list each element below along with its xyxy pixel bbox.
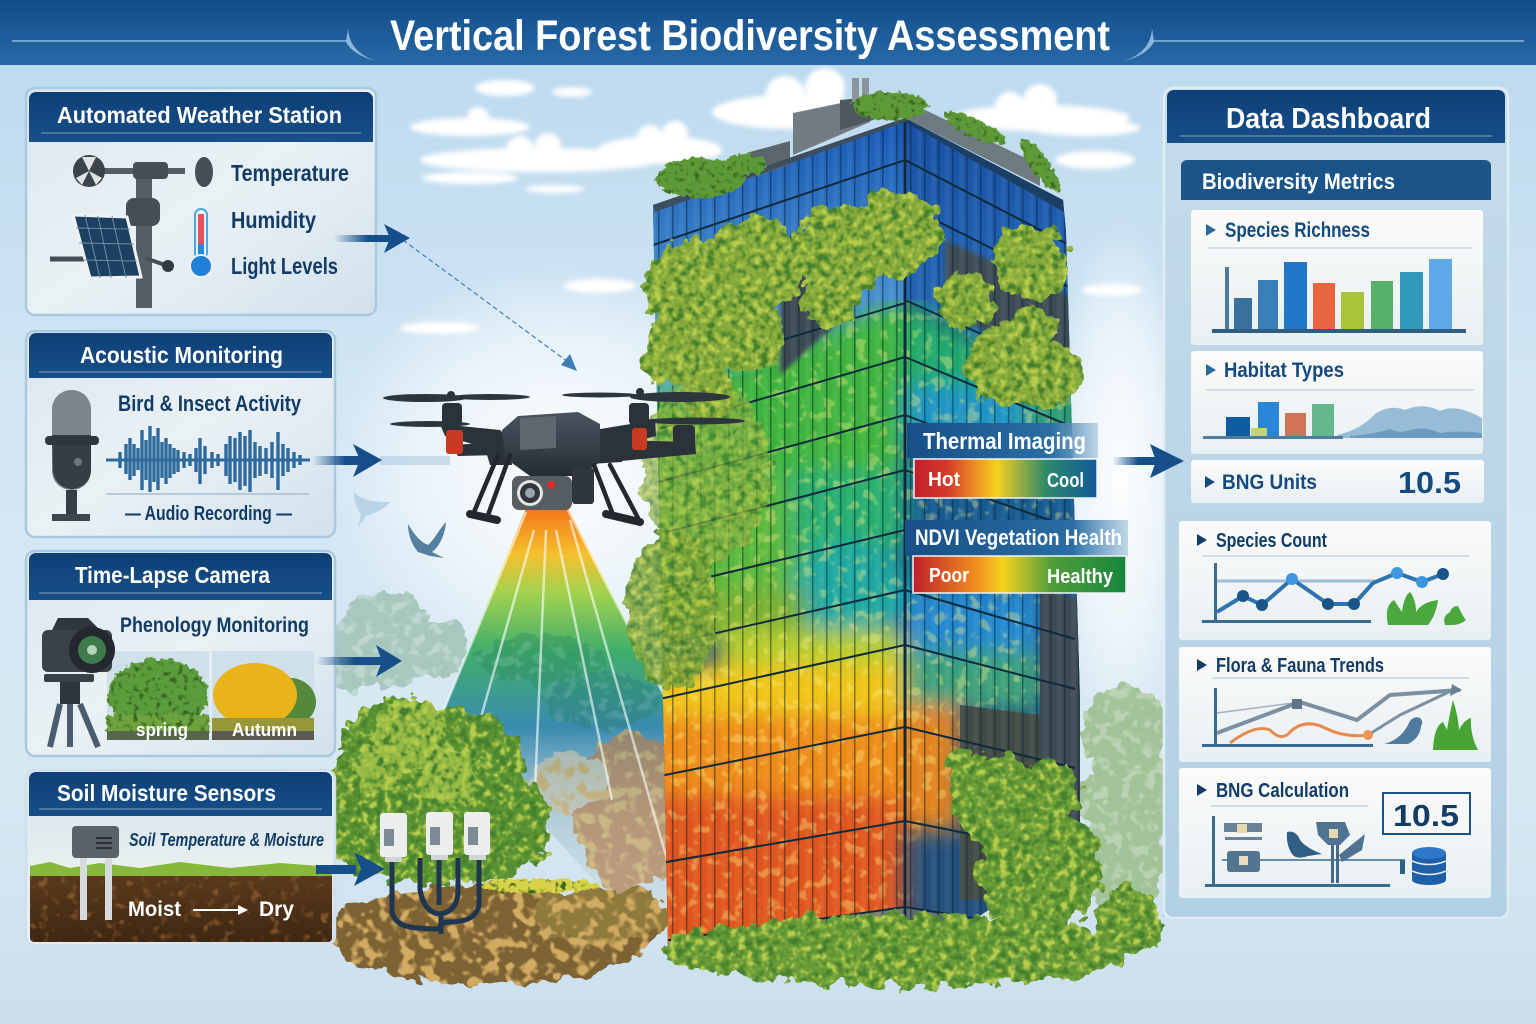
- heading: data dashboard: [1167, 90, 1505, 143]
- building: [640, 78, 1090, 970]
- card: species richness: Species Richness: [1225, 219, 1370, 242]
- card: BNG units: BNG Units: [1222, 471, 1317, 494]
- drone: [383, 388, 745, 522]
- fuselage: [502, 412, 600, 476]
- header band: [0, 0, 1536, 65]
- panel: soil moisture sensors: [26, 770, 335, 945]
- habitat chart: [1203, 402, 1482, 439]
- BNG value box: [1383, 793, 1470, 834]
- card: BNG units: 10.5: [1398, 465, 1461, 500]
- thermal colour wash on the facade: [640, 300, 1085, 965]
- panel: acoustic monitoring: [26, 331, 335, 537]
- icon: database: [1412, 847, 1446, 885]
- leaf litter ground: [325, 879, 670, 985]
- NDVI vegetation health legend: NDVI Vegetation Health: [915, 525, 1122, 550]
- sensing beam from drone: [443, 508, 770, 940]
- pale background trees: [322, 590, 1182, 908]
- moist to dry scale: Moist: [128, 898, 181, 921]
- label: audio recording: — Audio Recording —: [125, 503, 292, 525]
- heading: time-lapse: [29, 553, 332, 600]
- icon: plants: [1387, 592, 1466, 625]
- clouds: [400, 68, 1142, 334]
- audio waveform: [106, 426, 310, 492]
- arrow: acoustic to drone: [312, 444, 450, 477]
- faint trees visible through the beam: [475, 636, 660, 728]
- mullions: [640, 110, 1090, 970]
- dark glazing floors: [780, 225, 835, 375]
- moist to dry scale: Dry: [259, 898, 294, 921]
- arrow: soil panel to sensors: [316, 852, 385, 886]
- card: flora and fauna trends: [1179, 647, 1491, 762]
- heading: weather station: Automated Weather Station: [57, 102, 342, 128]
- heading: acoustic: [29, 333, 332, 378]
- card: BNG calculation: BNG Calculation: [1216, 780, 1349, 802]
- weather measurement labels: [231, 160, 349, 279]
- card: species count: Species Count: [1216, 530, 1327, 552]
- icon: thermometer: [190, 209, 212, 277]
- card: habitat types: Habitat Types: [1224, 359, 1344, 382]
- heading: soil: [29, 772, 332, 816]
- heading: time-lapse: Time-Lapse Camera: [75, 562, 270, 588]
- weather measurement labels: Humidity: [231, 207, 316, 233]
- line chart: species count: [1202, 563, 1466, 625]
- thermal imaging legend: Hot: [928, 469, 960, 491]
- heading: biodiversity metrics: [1181, 160, 1491, 200]
- NDVI vegetation health legend: Poor: [929, 565, 969, 587]
- heading: acoustic: Acoustic Monitoring: [80, 342, 283, 368]
- heading: weather station: [29, 92, 373, 142]
- camera gimbal: [572, 468, 594, 504]
- arrow: camera to drone beam: [316, 645, 402, 677]
- panel: time-lapse camera: [26, 551, 335, 756]
- arrow: building to dashboard: [1112, 444, 1184, 478]
- heading: data dashboard: Data Dashboard: [1226, 103, 1431, 135]
- seasonal photo: autumn: [212, 651, 316, 740]
- arrow: weather to drone: [334, 224, 410, 253]
- thermal imaging legend: Cool: [1047, 470, 1084, 492]
- birds: [354, 492, 446, 558]
- icon: weather mast with solar panel: [50, 155, 213, 308]
- thermal imaging legend: [907, 423, 1098, 498]
- foreground tree, left: [323, 698, 550, 884]
- card: BNG units: [1191, 460, 1484, 503]
- NDVI vegetation health legend: Healthy: [1047, 566, 1114, 588]
- card: species count: [1179, 521, 1491, 640]
- data link line to drone: [403, 240, 577, 371]
- moist to dry scale: [128, 898, 294, 921]
- roof plant and parapet: [653, 78, 1064, 212]
- seasonal photo: autumn: Autumn: [232, 720, 297, 740]
- landing legs: [470, 455, 640, 522]
- label: bird and insect activity: Bird & Insect Activity: [118, 391, 302, 416]
- panel: automated weather station: [26, 88, 376, 315]
- icon: soil probe: [72, 826, 119, 920]
- roof planting: [656, 92, 1066, 198]
- card: species richness: [1191, 210, 1483, 345]
- vertical forest foliage: [627, 191, 1082, 690]
- seasonal photo: spring: spring: [136, 720, 188, 740]
- BNG value box: 10.5: [1393, 798, 1459, 833]
- heading: biodiversity metrics: Biodiversity Metrics: [1202, 169, 1395, 194]
- BNG diagram: [1205, 816, 1446, 887]
- weather measurement labels: Temperature: [231, 160, 349, 186]
- faded lower-left foliage: [640, 380, 770, 560]
- icon: bird: [1384, 717, 1422, 744]
- icon: plant: [1433, 700, 1478, 750]
- card: habitat types: [1191, 351, 1483, 454]
- bar chart: species richness: [1212, 259, 1466, 333]
- label: phenology monitoring: Phenology Monitoring: [120, 614, 309, 637]
- base storey: [668, 908, 904, 946]
- thermal imaging legend: Thermal Imaging: [923, 428, 1086, 454]
- weather measurement labels: Light Levels: [231, 253, 338, 279]
- card: flora and fauna trends: Flora & Fauna Trends: [1216, 655, 1384, 677]
- title: Vertical Forest Biodiversity Assessment: [390, 12, 1110, 60]
- icon: camera on tripod: [42, 618, 115, 747]
- soil sensor units: [380, 812, 490, 934]
- seasonal photo: spring: [107, 651, 209, 740]
- NDVI vegetation health legend: [905, 520, 1128, 593]
- motors and arms: [440, 388, 696, 465]
- floor lines: [653, 160, 1075, 942]
- soil cross-section: [30, 816, 332, 943]
- icon: microphone: [45, 390, 99, 521]
- propellers: [383, 392, 745, 427]
- card: BNG calculation: [1179, 768, 1491, 898]
- foliage in front of building base: [660, 748, 1164, 986]
- panel: data dashboard: [1164, 88, 1508, 918]
- line chart: flora and fauna: [1202, 684, 1478, 750]
- heading: soil: Soil Moisture Sensors: [57, 780, 276, 806]
- label: soil temperature and moisture: Soil Temperature & Moisture: [129, 830, 324, 850]
